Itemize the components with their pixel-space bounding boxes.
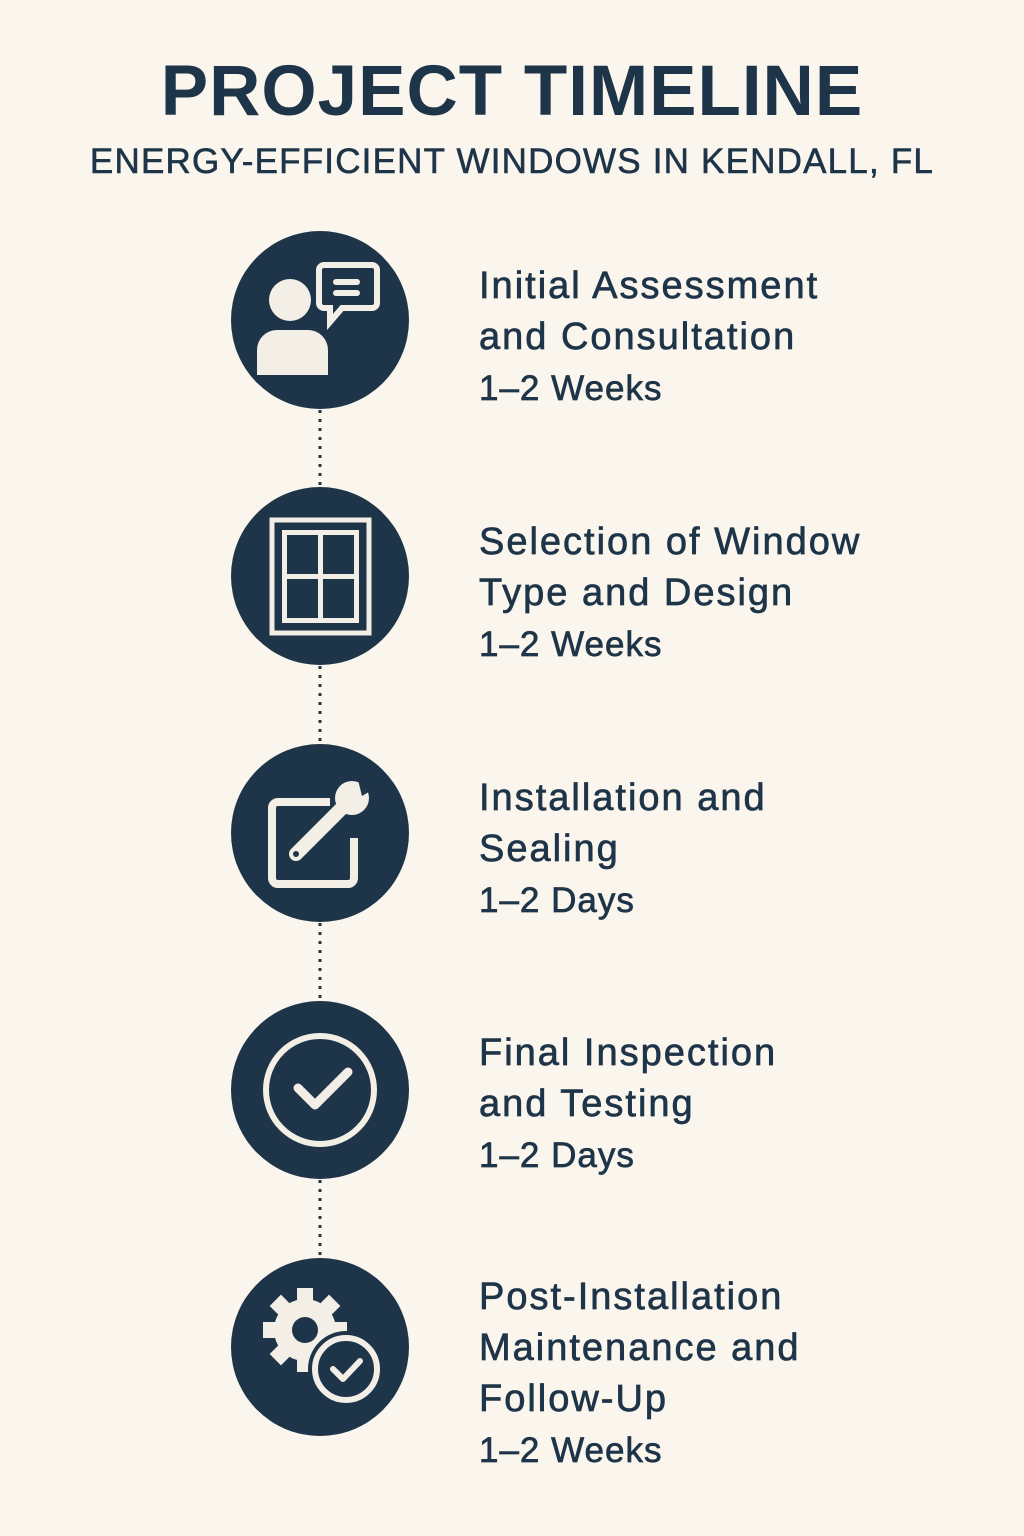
step 3 text: 1–2 Days (479, 881, 635, 920)
step 5 text (479, 1276, 801, 1470)
step 5 text: 1–2 Weeks (479, 1431, 662, 1470)
step 3 text: Installation and (479, 777, 767, 819)
step 4 text: Final Inspection (479, 1032, 777, 1074)
step 1 text: and Consultation (479, 316, 796, 358)
step 3 text (479, 777, 767, 920)
step 1 text (479, 265, 819, 408)
step 3 text: Sealing (479, 828, 620, 870)
step 1 text: 1–2 Weeks (479, 369, 662, 408)
step 4 text: and Testing (479, 1083, 695, 1125)
step 2 text (479, 521, 861, 664)
step 4 text: 1–2 Days (479, 1136, 635, 1175)
step 5 text: Post-Installation (479, 1276, 783, 1318)
step 2 text: 1–2 Weeks (479, 625, 662, 664)
step 2 text: Type and Design (479, 572, 794, 614)
subtitle: ENERGY-EFFICIENT WINDOWS IN KENDALL, FL (90, 142, 934, 181)
step 5 text: Maintenance and (479, 1327, 801, 1369)
icon: window (231, 487, 409, 665)
title: PROJECT TIMELINE (161, 52, 863, 131)
step 5 text: Follow-Up (479, 1378, 668, 1420)
step 2 text: Selection of Window (479, 521, 861, 563)
icon: consultation (231, 231, 409, 409)
icon: installation (231, 744, 409, 922)
step 1 text: Initial Assessment (479, 265, 819, 307)
icon: inspection check (231, 1001, 409, 1179)
icon: maintenance gear (231, 1258, 409, 1436)
step 4 text (479, 1032, 777, 1175)
